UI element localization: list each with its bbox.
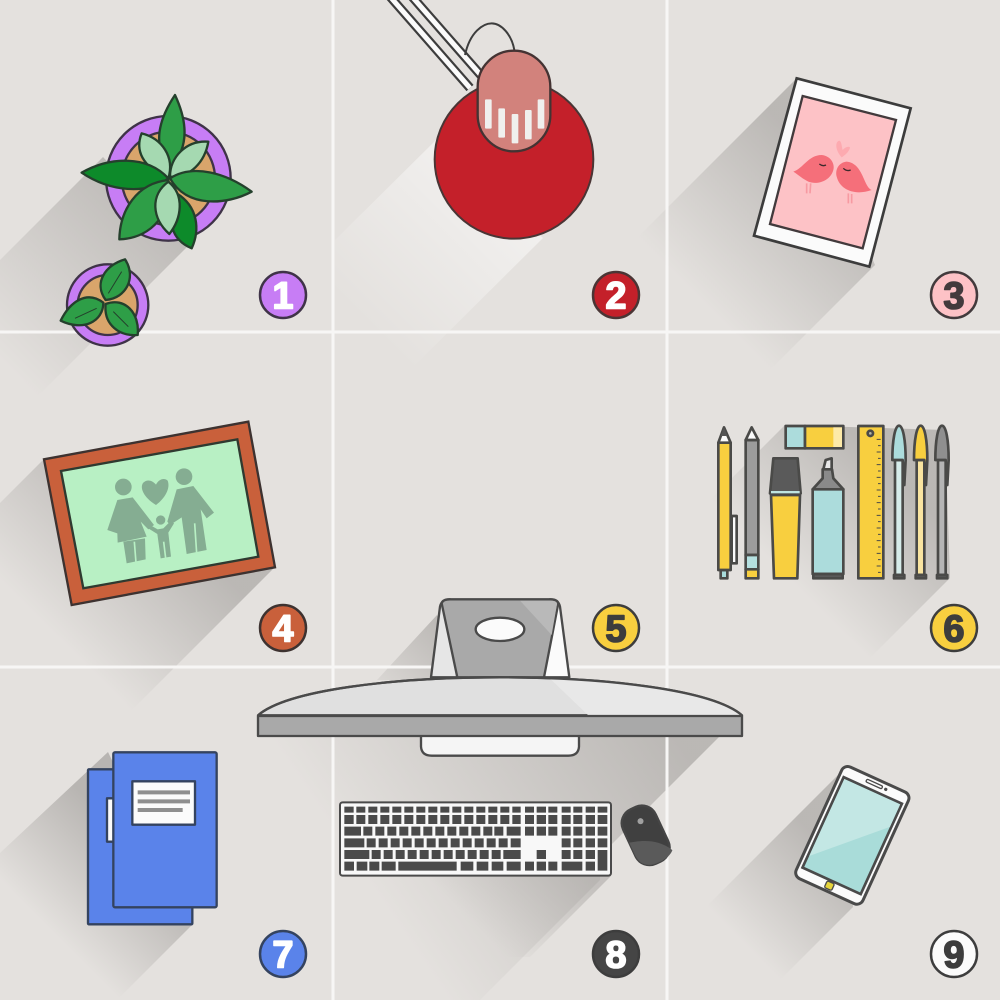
kissing birds <box>793 141 872 203</box>
badge 8: 8 <box>605 934 627 976</box>
lamp light beam <box>335 140 543 405</box>
badge 4: 4 <box>272 608 294 650</box>
family frame shadow <box>0 459 275 772</box>
grey pencil <box>746 427 758 578</box>
badge 4 <box>260 605 306 651</box>
badge 2: 2 <box>605 276 627 318</box>
teal ballpoint pen <box>892 426 906 578</box>
photo shadow <box>600 80 875 405</box>
plant shadow <box>0 157 187 404</box>
yellow pen <box>718 427 737 578</box>
folder label <box>132 781 195 825</box>
monitor stand <box>431 599 569 677</box>
icon: bird photo <box>754 78 911 267</box>
lamp vents <box>485 99 544 143</box>
wooden frame <box>44 422 275 605</box>
monitor edge <box>258 716 742 736</box>
stationery shadow <box>640 425 950 688</box>
badge 6: 6 <box>943 608 965 650</box>
eraser <box>786 426 843 448</box>
small pot <box>67 264 148 346</box>
back folder <box>88 769 192 924</box>
badge 9: 9 <box>943 934 965 976</box>
monitor foot <box>421 736 579 756</box>
badge 5 <box>593 605 639 651</box>
keyboard <box>340 802 611 876</box>
icon: stationery set <box>718 426 949 578</box>
badge 3 <box>931 272 977 318</box>
badge 6 <box>931 605 977 651</box>
teal marker <box>813 458 843 578</box>
badge 2 <box>593 272 639 318</box>
monitor shadow <box>258 736 720 1000</box>
icon: blue folders <box>88 752 217 924</box>
badge 8 <box>593 931 639 977</box>
phone shadow <box>640 773 853 1000</box>
icon: desktop computer <box>258 599 742 876</box>
badge 3: 3 <box>943 276 965 318</box>
icon: family picture frame <box>44 422 275 605</box>
icon: smartphone <box>794 764 911 906</box>
badge 7 <box>260 931 306 977</box>
phone screen <box>799 770 905 902</box>
keyboard keys <box>344 807 607 871</box>
badge 7: 7 <box>272 934 294 976</box>
yellow highlighter <box>770 458 801 578</box>
lamp shade <box>435 80 593 239</box>
folder tab <box>107 798 114 842</box>
ruler <box>858 426 883 578</box>
photo border <box>754 78 911 267</box>
lamp head <box>478 51 550 151</box>
yellow ballpoint pen <box>914 426 927 578</box>
lamp arm <box>388 0 514 88</box>
family silhouette <box>107 468 214 563</box>
badge 5: 5 <box>605 608 627 650</box>
mouse <box>617 801 675 870</box>
front folder <box>113 752 217 907</box>
small plant leaves <box>61 259 138 335</box>
folders shadow <box>0 752 192 1000</box>
badge 9 <box>931 931 977 977</box>
phone speaker <box>866 779 883 789</box>
badge 1 <box>260 272 306 318</box>
green picture <box>61 439 258 588</box>
grey ballpoint pen <box>935 426 949 578</box>
keyboard shadow <box>400 802 611 957</box>
icon: desk lamp <box>388 0 593 239</box>
monitor stand shadow <box>377 615 470 680</box>
phone body <box>794 764 911 906</box>
large plant leaves <box>82 95 252 248</box>
photo picture <box>770 96 896 248</box>
icon: potted plants <box>61 95 252 346</box>
phone button <box>824 881 835 891</box>
large pot <box>106 116 231 241</box>
monitor display <box>258 677 742 715</box>
badge 1: 1 <box>272 276 294 318</box>
